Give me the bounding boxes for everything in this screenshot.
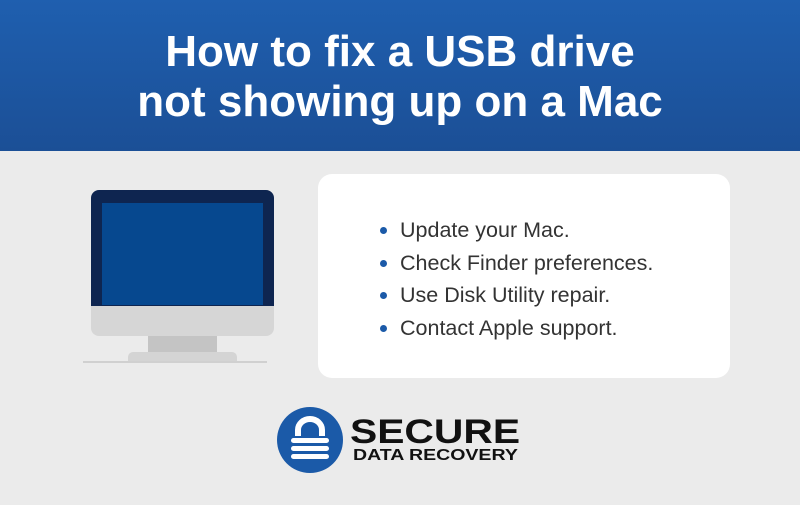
- panel: tips card: [318, 174, 730, 378]
- title: [137, 27, 663, 126]
- logo text: SECURE: [350, 413, 520, 451]
- header banner: [0, 0, 800, 151]
- bullet list: Use Disk Utility repair.: [400, 283, 610, 307]
- icon: monitor: [83, 190, 274, 363]
- bullet list: Update your Mac.: [400, 218, 570, 242]
- logo: DATA RECOVERY: [353, 447, 518, 464]
- title: How to fix a USB drive: [165, 27, 635, 76]
- logo: [277, 407, 520, 473]
- icon: lock circle: [277, 407, 343, 473]
- title: not showing up on a Mac: [137, 77, 663, 126]
- bullet list: [380, 218, 653, 340]
- bullet list: Contact Apple support.: [400, 316, 618, 340]
- bullet list: Check Finder preferences.: [400, 250, 653, 274]
